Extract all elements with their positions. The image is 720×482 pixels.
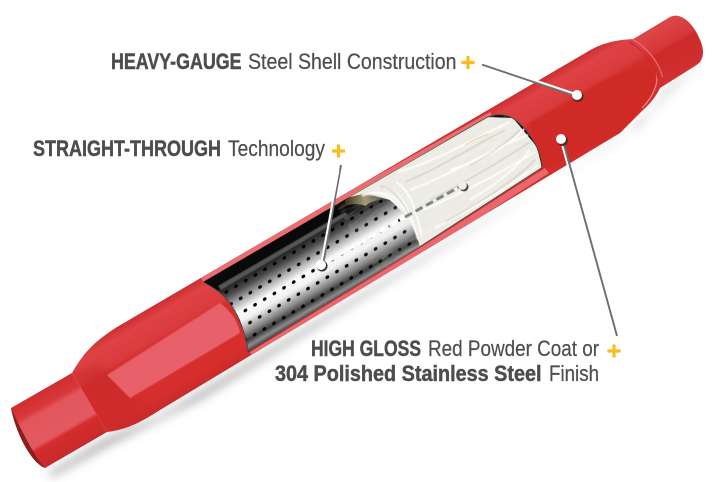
callout: heavy-gauge steel shell: Steel Shell Construction [248, 49, 456, 74]
callout: straight-through technology [33, 136, 468, 272]
right pipe [630, 16, 703, 88]
cutaway opening [203, 114, 542, 352]
opening edge [203, 114, 542, 352]
perforated tube [218, 197, 444, 352]
drop shadow [50, 62, 703, 478]
callout: high gloss finish: Red Powder Coat or [428, 336, 599, 361]
inner shell stripe [218, 212, 348, 290]
callout: high gloss finish: Finish [549, 361, 599, 386]
fiberglass packing [336, 116, 542, 270]
callout: high gloss finish [275, 134, 620, 386]
callout: heavy-gauge steel shell: HEAVY-GAUGE [111, 49, 242, 74]
callout: straight-through technology: STRAIGHT-THROUGH [33, 136, 221, 161]
callout: straight-through technology: Technology [228, 136, 325, 161]
body shading and highlights [72, 39, 663, 432]
left pipe [11, 373, 107, 468]
callout: heavy-gauge steel shell [111, 49, 584, 102]
callout: high gloss finish: 304 Polished Stainless Steel [275, 361, 542, 386]
muffler body shell [72, 39, 663, 432]
callout: high gloss finish: HIGH GLOSS [311, 336, 421, 361]
